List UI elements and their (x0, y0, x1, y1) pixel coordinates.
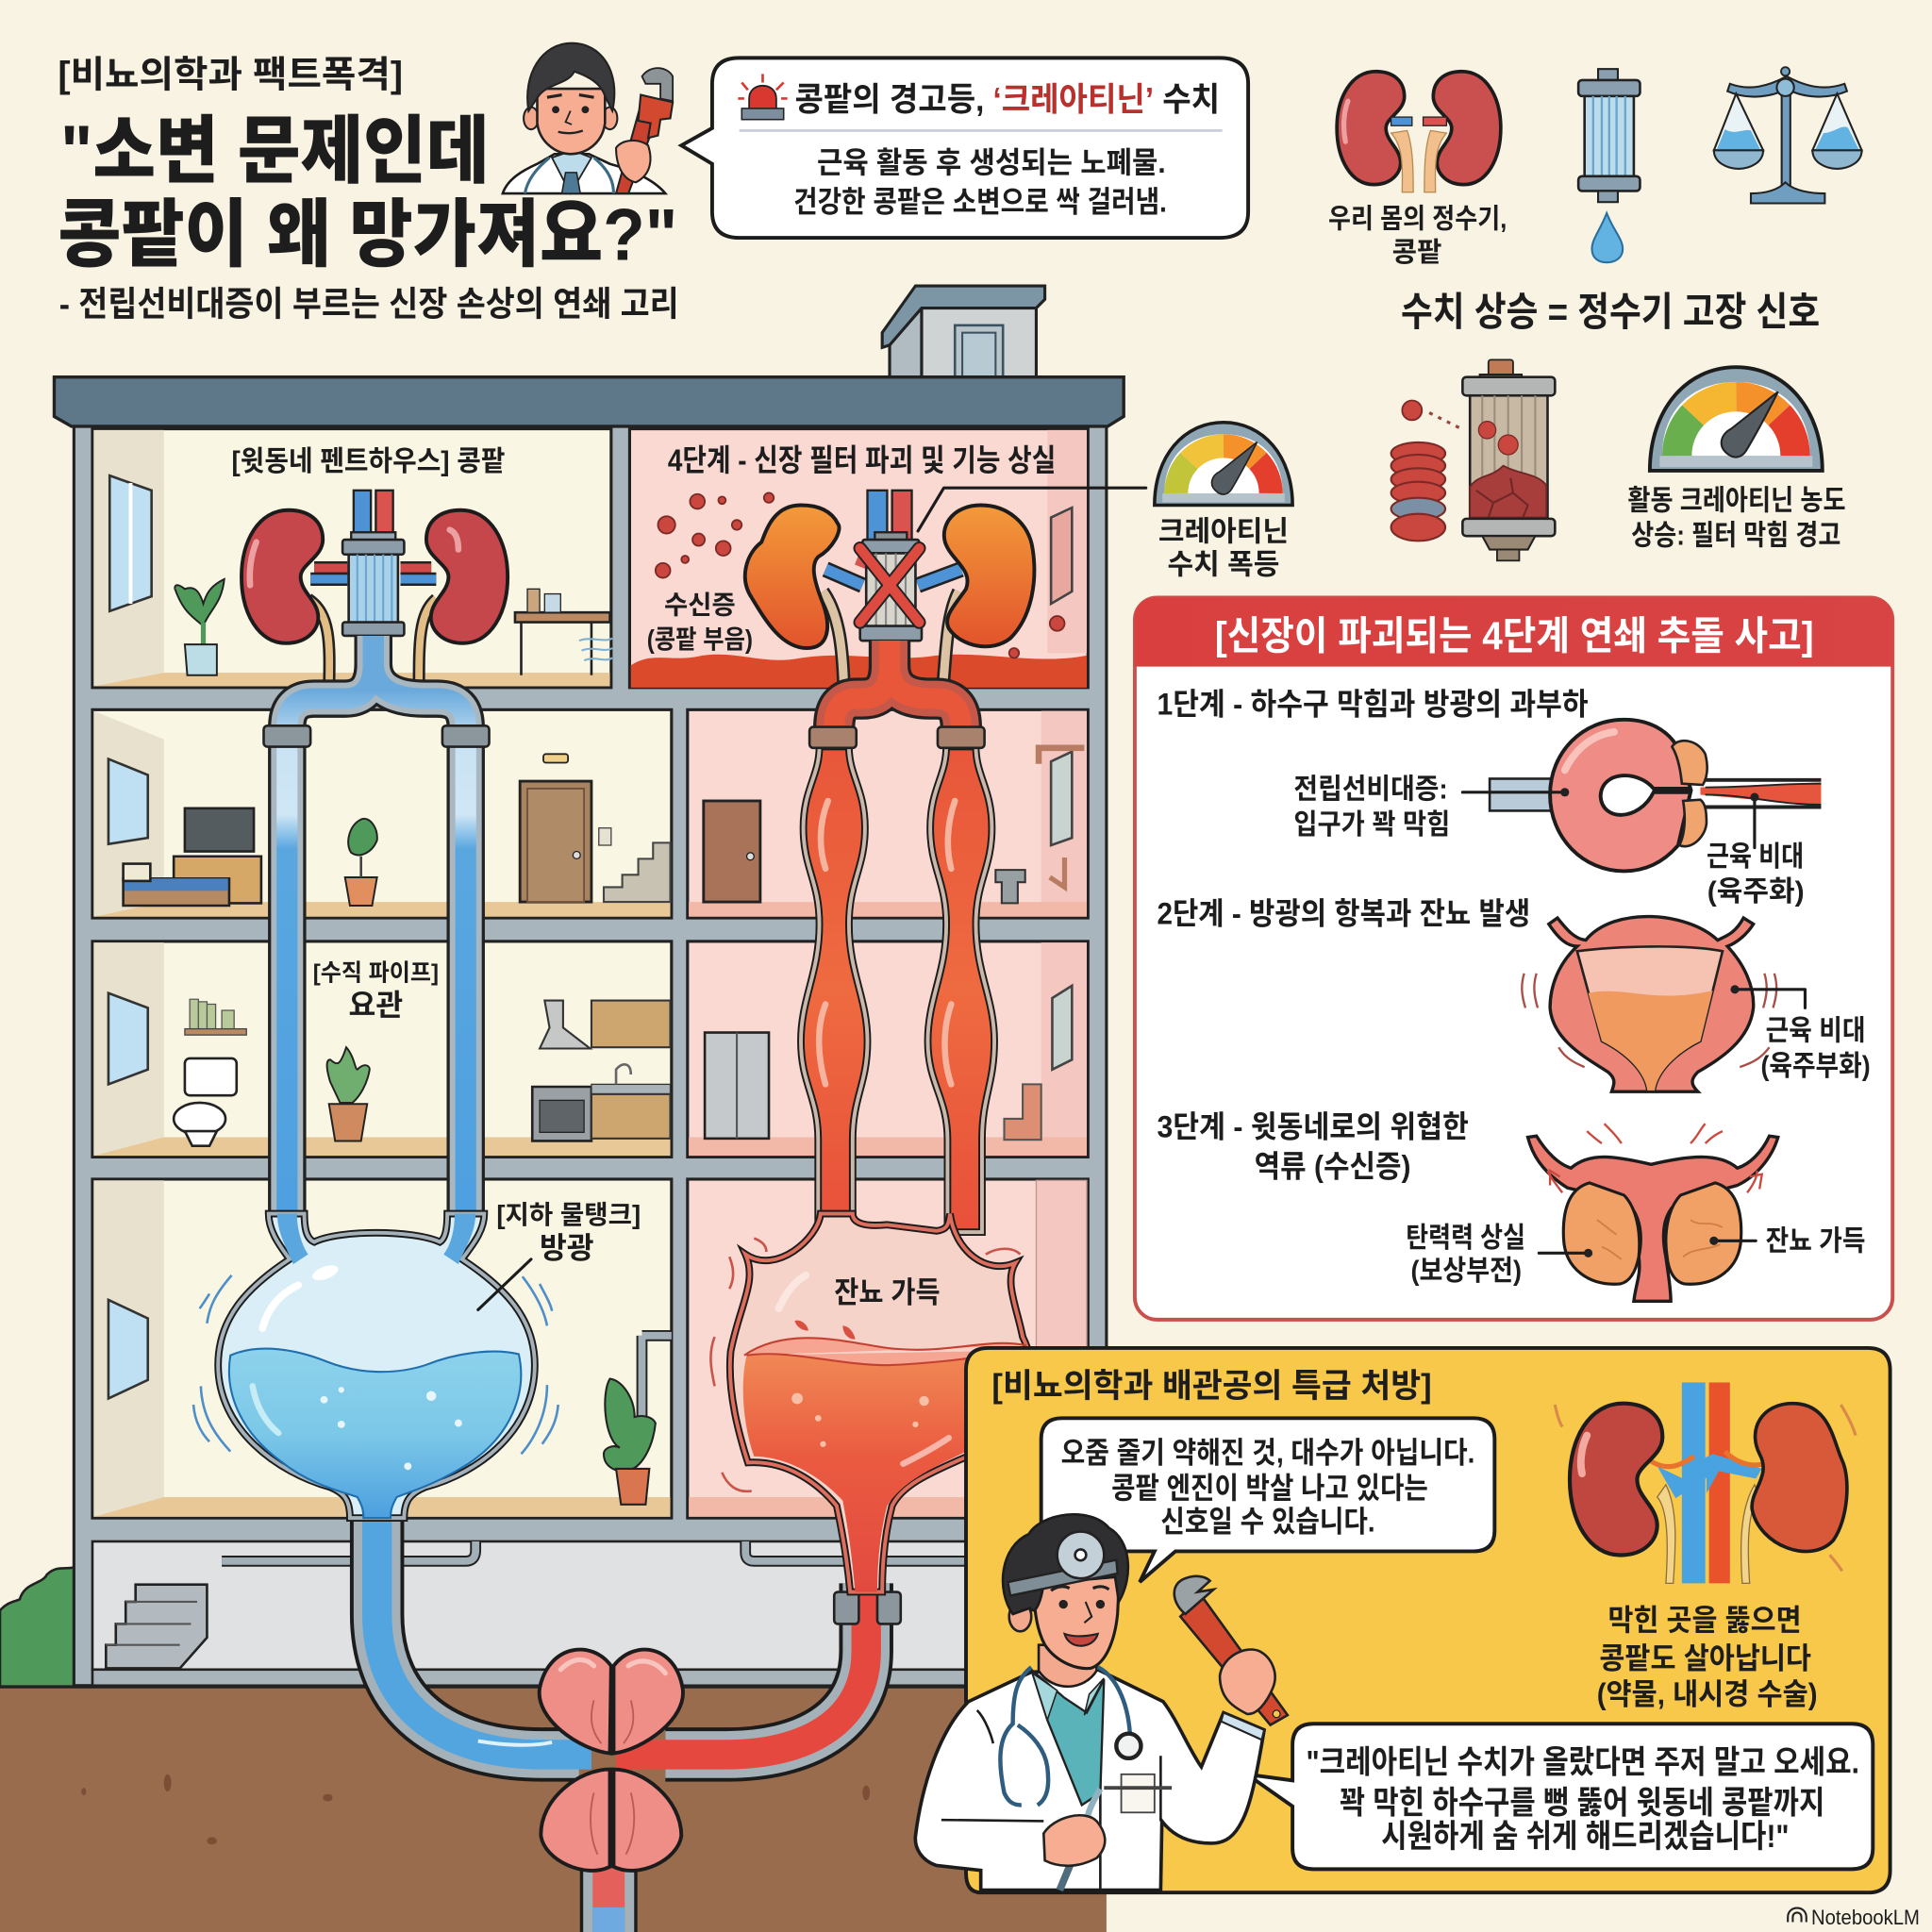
label: gauge high (1627, 486, 1846, 551)
stage 1 left label (1293, 774, 1569, 841)
walls (74, 416, 1107, 1686)
stage 1 right label: (육주화) (1707, 876, 1805, 908)
left kidney (242, 510, 323, 643)
damaged bladder (710, 1214, 1035, 1592)
text: recovery message: 콩팥도 살아납니다 (1599, 1641, 1811, 1674)
room: penthouse healthy (92, 429, 611, 688)
room: tank right (688, 1179, 1088, 1518)
ground (0, 1687, 1107, 1932)
vessels (308, 491, 436, 690)
stage 1 left label: 전립선비대증: (1293, 774, 1448, 805)
label: gauge spike: 크레아티닌 (1158, 516, 1289, 547)
speech bubble: warning: 오줌 줄기 약해진 것, 대수가 아닙니다. (1061, 1436, 1474, 1469)
left bulging ureter (801, 747, 868, 1232)
room: floor 2 right (688, 941, 1088, 1157)
callout body: 근육 활동 후 생성되는 노폐물. (817, 146, 1166, 179)
label: hydronephrosis: (콩팥 부음) (647, 625, 753, 654)
creatinine stack (1391, 442, 1445, 541)
doctor coat (915, 1670, 1264, 1890)
main title: "소변 문제인데 (60, 109, 490, 192)
icon: clogged filter with creatinine (1391, 359, 1555, 560)
stage 3 left label (1406, 1223, 1592, 1287)
callout: creatinine warning (681, 58, 1248, 238)
stage 2 label: 근육 비대 (1766, 1015, 1865, 1046)
label: hydronephrosis: 수신증 (664, 590, 736, 619)
stage 2 illustration (1522, 917, 1776, 1091)
stage 2 label (1730, 985, 1871, 1082)
roof stair house (882, 286, 1045, 377)
heading: rising value: 수치 상승 = 정수기 고장 신호 (1401, 290, 1820, 334)
healthy lower blue pipe (377, 1509, 591, 1755)
label: ureter: [수직 파이프] (313, 960, 439, 987)
filter (342, 532, 404, 636)
subtitle: - 전립선비대증이 부르는 신장 손상의 연쇄 고리 (59, 284, 679, 323)
icon: balance scale (1714, 67, 1862, 204)
wrench (616, 105, 660, 193)
pointer line (918, 488, 1146, 531)
icon: clean filter and drop (1578, 69, 1640, 262)
icon: gauge high (1650, 367, 1823, 471)
icon: siren (738, 74, 788, 120)
label: stage 4: 4단계 - 신장 필터 파괴 및 기능 상실 (668, 442, 1056, 477)
urethra (581, 1868, 636, 1932)
cystoscope and pocket (1059, 1774, 1172, 1890)
room: tank left (92, 1179, 672, 1518)
stage 3 right label: 잔뇨 가득 (1766, 1226, 1865, 1257)
speech bubble: call to action: 시원하게 숨 쉬게 해드리겠습니다!" (1381, 1819, 1789, 1855)
icon: gauge spike (1155, 423, 1292, 506)
room: floor 2 left (92, 941, 672, 1157)
basement (92, 1541, 1029, 1686)
healthy upper blue pipe (264, 636, 490, 1220)
panel: 4 stage chain (1135, 597, 1892, 1320)
stage 1 illustration (1490, 720, 1821, 871)
stage 1 right label (1707, 792, 1805, 908)
stage 3 left label: (보상부전) (1411, 1256, 1522, 1287)
label: gauge spike (1158, 516, 1289, 581)
left swollen kidney (745, 506, 840, 648)
furniture: floor 3 right (704, 748, 1084, 903)
room labels (232, 442, 1056, 1309)
speech bubble: call to action (1247, 1724, 1873, 1869)
stage 3 heading: 3단계 - 윗동네로의 위협한 (1157, 1109, 1469, 1144)
speech bubble: call to action: 꽉 막힌 하수구를 뻥 뚫어 윗동네 콩팥까지 (1340, 1786, 1824, 1822)
label: ureter (313, 960, 439, 1022)
stage 1 heading: 1단계 - 하수구 막힘과 방광의 과부하 (1157, 687, 1589, 722)
callout heading: 콩팥의 경고등, ‘크레아티닌’ 수치 (794, 82, 1220, 119)
roof (54, 377, 1124, 426)
label: bladder (496, 1200, 641, 1265)
label: gauge spike: 수치 폭등 (1168, 550, 1279, 581)
text: recovery message (1597, 1604, 1818, 1710)
furniture: floor 4 (109, 475, 612, 675)
label: penthouse: [윗동네 펜트하우스] 콩팥 (232, 446, 506, 477)
stage 3 heading: 역류 (수신증) (1255, 1148, 1411, 1183)
hand (1043, 1815, 1105, 1866)
particles (656, 492, 1064, 658)
stethoscope (1000, 1667, 1141, 1805)
text: recovery message: 막힌 곳을 뚫으면 (1607, 1604, 1802, 1637)
damaged lower red pipe (616, 1583, 901, 1755)
stage 3 heading (1157, 1109, 1469, 1183)
furniture: tank rooms (108, 1300, 672, 1505)
bladder pointer line (478, 1259, 531, 1309)
label: kidney purifier: 콩팥 (1392, 238, 1441, 268)
stage 3 illustration (1528, 1124, 1778, 1301)
panel header (1135, 597, 1892, 667)
prostate (540, 1650, 683, 1871)
stage 3 left label: 탄력력 상실 (1406, 1223, 1525, 1254)
label: gauge high: 활동 크레아티닌 농도 (1627, 486, 1846, 517)
doctor with wrench (915, 1514, 1288, 1890)
main title (58, 109, 677, 276)
speech bubble: call to action: "크레아티닌 수치가 올랐다면 주저 말고 오세요. (1306, 1745, 1859, 1781)
label: ureter: 요관 (349, 989, 403, 1022)
room: floor 3 right (688, 709, 1088, 918)
label: gauge high: 상승: 필터 막힘 경고 (1631, 520, 1840, 551)
callout body (793, 146, 1167, 219)
stage 1 left label: 입구가 꽉 막힘 (1293, 809, 1450, 841)
furniture: floor 2 left (108, 993, 671, 1146)
icon: kidney pair (1337, 72, 1501, 192)
stage 2 heading: 2단계 - 방광의 항복과 잔뇨 발생 (1157, 896, 1530, 931)
right bulging ureter (928, 747, 994, 1232)
label: bladder: 방광 (540, 1232, 594, 1265)
speech bubble: warning (1041, 1418, 1494, 1582)
label: kidney purifier: 우리 몸의 정수기, (1328, 205, 1507, 235)
panel title: [비뇨의학과 배관공의 특급 처방] (991, 1368, 1432, 1405)
furniture: floor 2 right (705, 986, 1072, 1140)
room: penthouse damaged (629, 429, 1088, 688)
main title: 콩팥이 왜 망가져요?" (58, 193, 677, 276)
stage 1 right label: 근육 비대 (1707, 841, 1804, 873)
damaged kidneys and filter (656, 488, 1146, 690)
speech bubble: warning: 신호일 수 있습니다. (1160, 1506, 1375, 1539)
stage 3 right label (1709, 1226, 1865, 1257)
healthy bladder (193, 1214, 558, 1518)
room: floor 3 left (92, 709, 672, 918)
building (54, 286, 1124, 1686)
damaged upper red pipe (801, 641, 994, 1232)
callout body: 건강한 콩팥은 소변으로 싹 걸러냄. (793, 186, 1167, 219)
healthy kidneys and filter (242, 491, 508, 690)
vessels (823, 491, 961, 690)
kicker label: [비뇨의학과 팩트폭격] (58, 56, 403, 96)
label: bladder: [지하 물탱크] (496, 1200, 641, 1229)
bush (0, 1567, 74, 1688)
doctor face (1003, 1514, 1128, 1687)
doctor shirt (1031, 1670, 1104, 1805)
NotebookLM mark: NotebookLM (1811, 1906, 1920, 1929)
panel title: [신장이 파괴되는 4단계 연쇄 추돌 사고] (1215, 613, 1814, 658)
furniture: floor 3 left (108, 754, 671, 906)
label: kidney purifier (1328, 205, 1507, 268)
text: recovery message: (약물, 내시경 수술) (1597, 1677, 1818, 1710)
icon: recovering kidneys (1555, 1382, 1856, 1583)
wrench (1174, 1576, 1288, 1725)
label: residual urine: 잔뇨 가득 (834, 1276, 941, 1309)
stage 2 label: (육주부화) (1760, 1051, 1871, 1082)
right kidney (426, 510, 508, 643)
label: hydronephrosis (647, 590, 753, 654)
right swollen kidney (944, 506, 1034, 646)
icon: small doctor with wrench (503, 43, 673, 193)
speech bubble: warning: 콩팥 엔진이 박살 나고 있다는 (1111, 1472, 1428, 1505)
broken filter (860, 532, 922, 641)
panel: plumber prescription (966, 1348, 1890, 1892)
